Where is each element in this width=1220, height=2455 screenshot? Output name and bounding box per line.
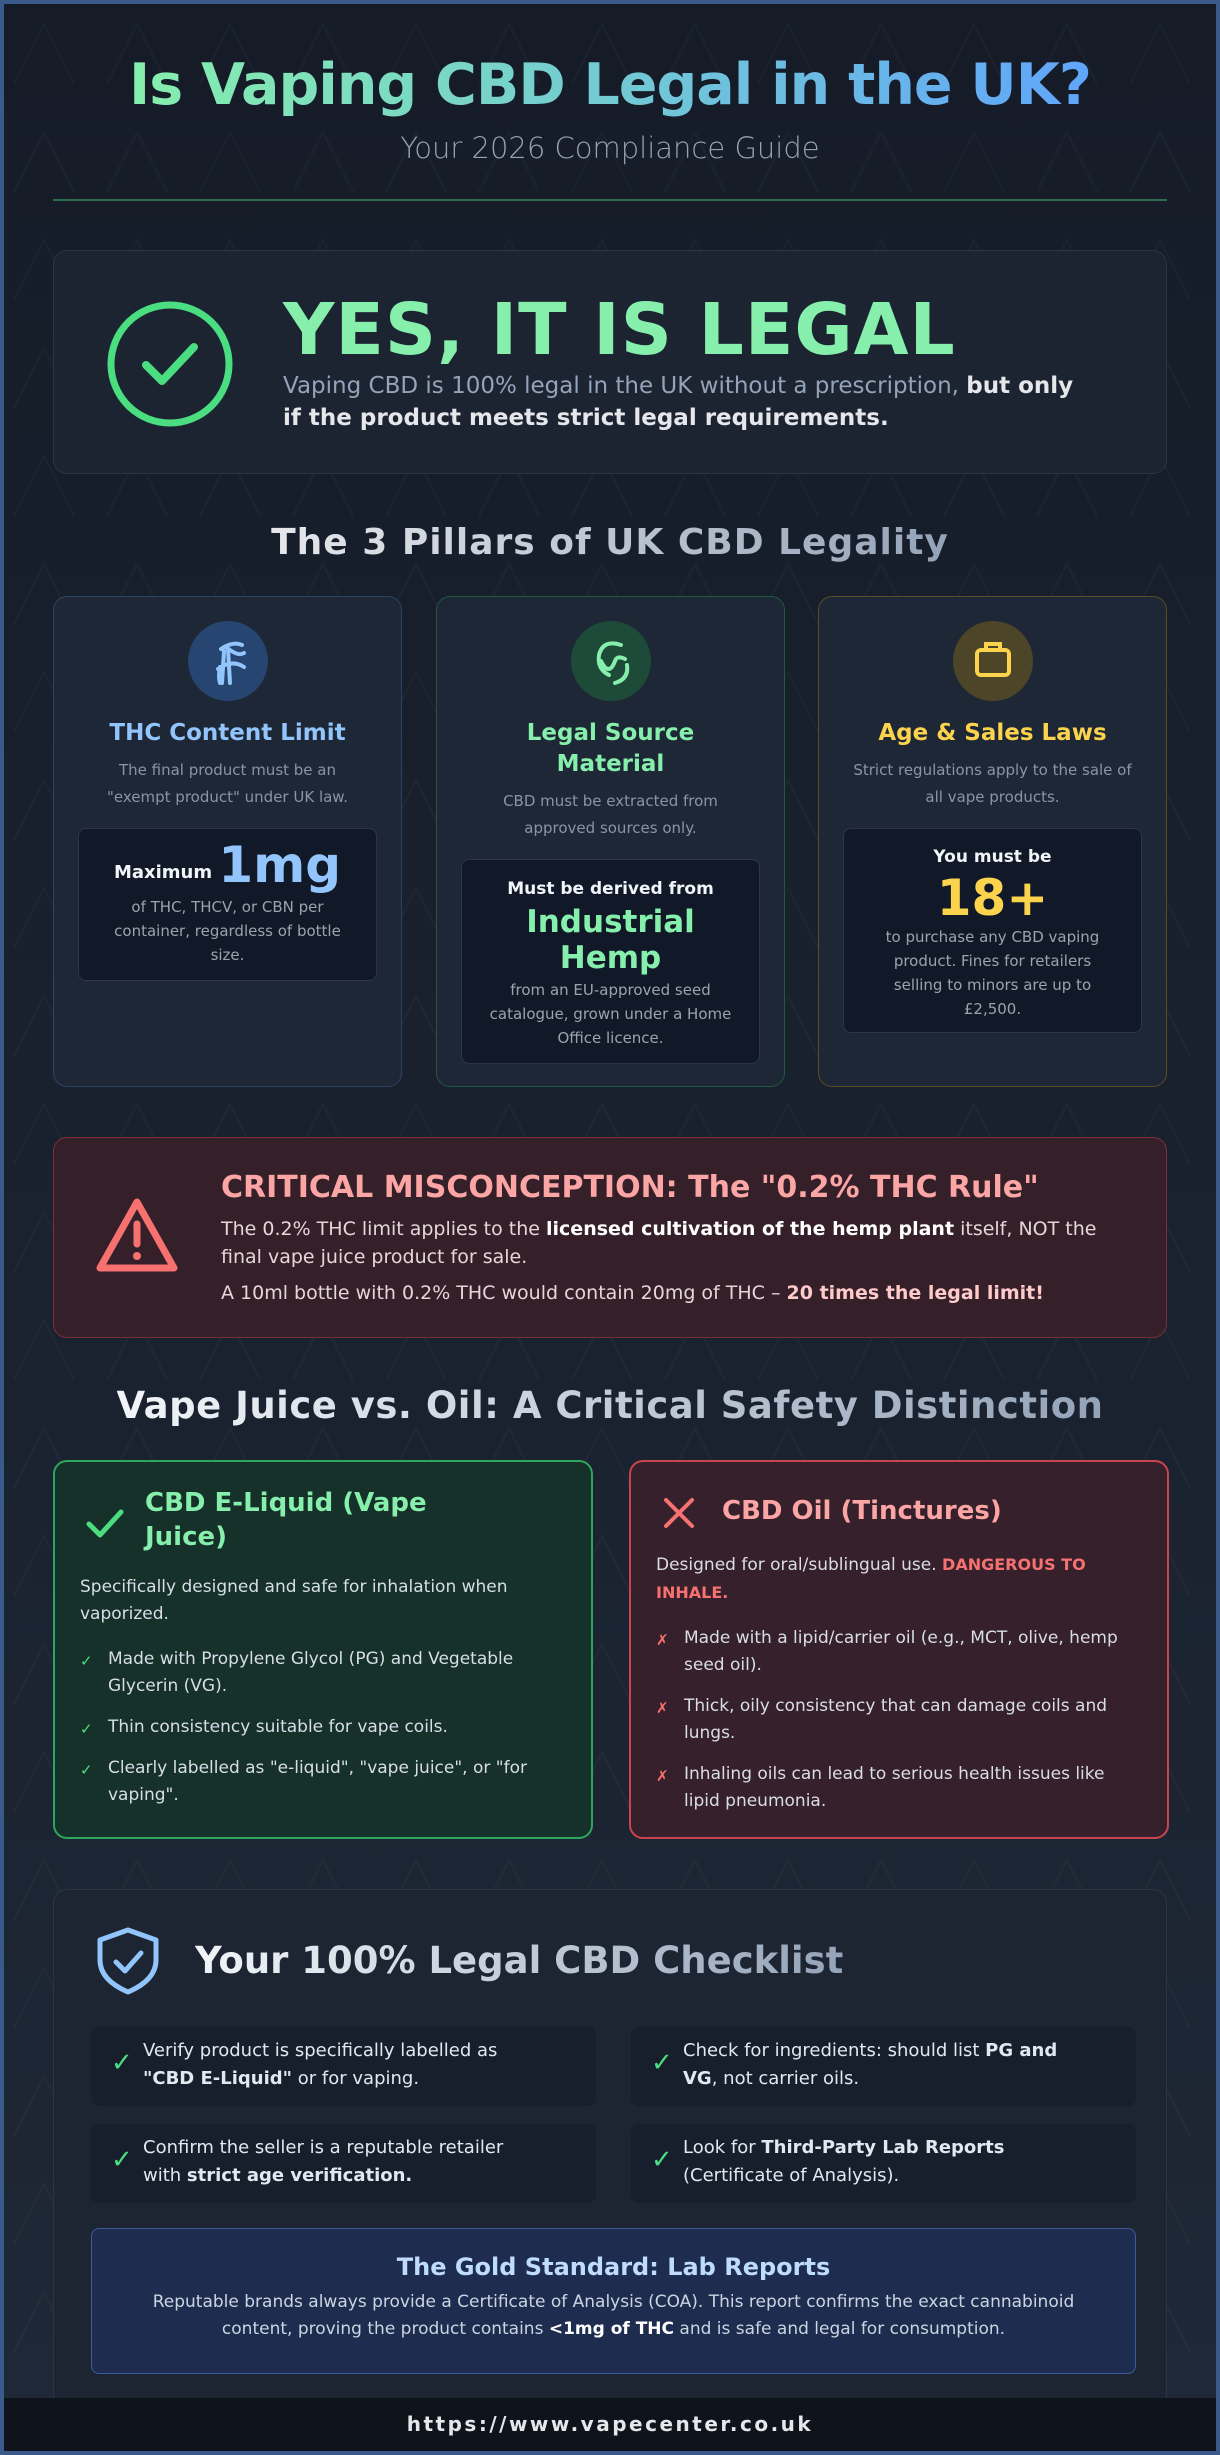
icon: cross [664, 1498, 694, 1528]
icon: recycle [571, 621, 651, 701]
title: Is Vaping CBD Legal in the UK? [129, 52, 1091, 118]
panel: legal source [436, 596, 785, 1087]
item 4 [631, 2124, 1136, 2203]
text list: Made with a lipid/carrier oil (e.g., MCT, olive, hemp seed oil). [684, 1628, 1118, 1675]
item 2: ✓ [651, 2048, 673, 2078]
text list: ✓ [80, 1652, 93, 1670]
title: THC Content Limit [109, 720, 346, 746]
item 1 [91, 2027, 596, 2106]
box: hemp: Industrial Hemp [526, 904, 695, 976]
text list [80, 1577, 527, 1805]
callout: gold standard: Reputable brands always provide a Certificate of Analysis (COA). This report confirms the exact cannabinoid [153, 2292, 1074, 2312]
text [220, 1218, 1096, 1304]
callout: gold standard: The Gold Standard: Lab Reports [397, 2253, 830, 2281]
heading: juice vs oil: Vape Juice vs. Oil: A Critical Safety Distinction [117, 1384, 1103, 1427]
item 2 [631, 2027, 1136, 2106]
headline: YES, IT IS LEGAL [283, 288, 956, 371]
item 2: VG, not carrier oils. [683, 2068, 859, 2089]
item 4: ✓ [651, 2145, 673, 2175]
text: A 10ml bottle with 0.2% THC would contain 20mg of THC – 20 times the legal limit! [221, 1282, 1044, 1304]
heading: 3 pillars: The 3 Pillars of UK CBD Legality [271, 522, 949, 563]
text list: Inhaling oils can lead to serious health issues like lipid pneumonia. [684, 1764, 1104, 1811]
icon: check circle [108, 302, 232, 426]
box: hemp [461, 859, 760, 1064]
item 3: with strict age verification. [143, 2165, 412, 2186]
box: hemp: Must be derived from [507, 879, 714, 899]
item 1: ✓ [111, 2048, 133, 2078]
text list: ✓ [80, 1761, 93, 1779]
title: Age & Sales Laws [878, 720, 1107, 746]
panel: e-liquid [53, 1460, 593, 1839]
footer: https://www.vapecenter.co.uk [407, 2412, 813, 2436]
text list: Designed for oral/sublingual use. DANGEROUS TO INHALE. [656, 1555, 1086, 1602]
heading: CBD E-Liquid (Vape Juice) [145, 1488, 427, 1552]
heading: CRITICAL MISCONCEPTION: The "0.2% THC Rule" [221, 1170, 1039, 1205]
callout: gold standard [91, 2228, 1136, 2374]
text list: ✗ [656, 1767, 669, 1785]
heading: CBD Oil (Tinctures) [722, 1496, 1002, 1526]
footer [4, 2398, 1216, 2451]
heading: Your 100% Legal CBD Checklist [195, 1939, 843, 1982]
text list: Thin consistency suitable for vape coils. [108, 1717, 448, 1737]
desc: The final product must be an "exempt product" under UK law. [107, 761, 348, 806]
text: The 0.2% THC limit applies to the licensed cultivation of the hemp plant itself, NOT the final vape juice product for sale. [221, 1218, 1096, 1268]
item 1: "CBD E-Liquid" or for vaping. [143, 2068, 419, 2089]
box: 18+: You must be [933, 847, 1052, 867]
icon: leaf [188, 621, 268, 701]
panel: misconception [53, 1137, 1167, 1338]
box: 18+: 18+ [937, 869, 1048, 927]
panel: age laws [818, 596, 1167, 1087]
panel: checklist [53, 1889, 1167, 2449]
item 4: (Certificate of Analysis). [683, 2165, 899, 2186]
text [283, 373, 1073, 431]
text list: Specifically designed and safe for inhalation when vaporized. [80, 1577, 508, 1624]
box: 18+ [843, 828, 1142, 1033]
item 3: ✓ [111, 2145, 133, 2175]
item 1: Verify product is specifically labelled as [143, 2040, 497, 2061]
text list: Made with Propylene Glycol (PG) and Vegetable Glycerin (VG). [108, 1649, 513, 1696]
desc: CBD must be extracted from approved sources only. [503, 792, 718, 837]
box: 1mg: Maximum 1mg [114, 836, 341, 894]
desc: Strict regulations apply to the sale of all vape products. [853, 761, 1132, 806]
title: Legal Source Material [527, 720, 694, 777]
icon: warning [96, 1198, 178, 1272]
icon: check [86, 1510, 124, 1538]
text list: Thick, oily consistency that can damage coils and lungs. [684, 1696, 1107, 1743]
icon: shield [98, 1928, 158, 1994]
box: 18+: to purchase any CBD vaping product. Fines for retailers selling to minors are up to £2,500. [886, 928, 1099, 1018]
item 3: Confirm the seller is a reputable retailer [143, 2137, 503, 2158]
box: 1mg [78, 828, 377, 981]
panel: oil [629, 1460, 1169, 1839]
text list: ✓ [80, 1720, 93, 1738]
text list: ✗ [656, 1631, 669, 1649]
text: if the product meets strict legal requirements. [283, 405, 889, 431]
callout: gold standard: content, proving the product contains <1mg of THC and is safe and legal for consumption. [222, 2319, 1005, 2339]
item 3 [91, 2124, 596, 2203]
text list: ✗ [656, 1699, 669, 1717]
subtitle: Your 2026 Compliance Guide [400, 131, 820, 165]
panel: yes it is legal [53, 250, 1167, 474]
icon: briefcase [953, 621, 1033, 701]
text list: Clearly labelled as "e-liquid", "vape juice", or "for vaping". [108, 1758, 527, 1805]
text list [656, 1555, 1118, 1811]
box: 1mg: of THC, THCV, or CBN per container, regardless of bottle size. [114, 898, 341, 964]
box: hemp: from an EU-approved seed catalogue, grown under a Home Office licence. [490, 981, 731, 1047]
item 4: Look for Third-Party Lab Reports [683, 2137, 1004, 2158]
panel: THC limit [53, 596, 402, 1087]
text: Vaping CBD is 100% legal in the UK without a prescription, but only [283, 373, 1073, 399]
item 2: Check for ingredients: should list PG and [683, 2040, 1057, 2061]
